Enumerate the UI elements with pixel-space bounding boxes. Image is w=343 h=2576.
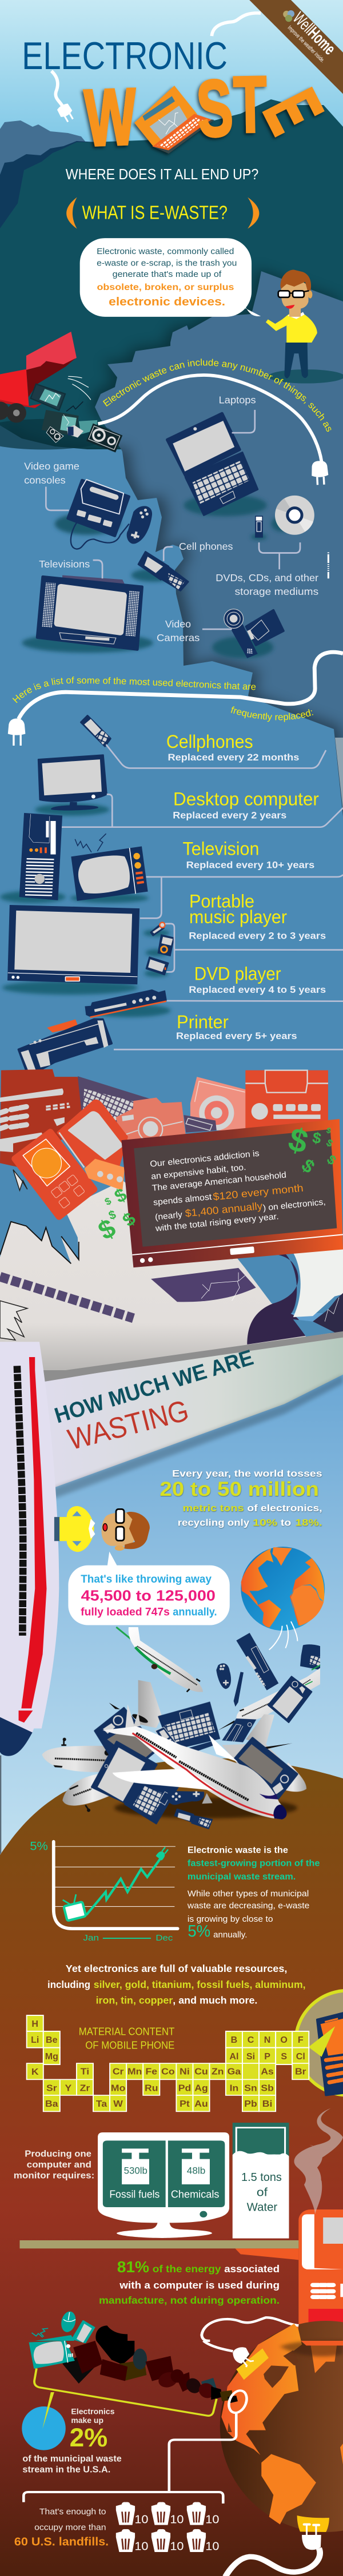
television: Televisions [39,558,90,570]
energy text: 81% [117,2259,149,2276]
growth text: annually. [213,1930,247,1939]
landfill text: That's enough to [39,2507,106,2517]
globe bottom [220,2321,343,2532]
periodic table lower rows: Sr [46,2084,57,2093]
periodic table lower rows: Cr [113,2067,124,2076]
red electronics pile [0,1069,328,1217]
speech bubble: definition: electronic devices. [109,295,225,308]
laptop screen with addiction text: $1,400 annually [185,1200,263,1219]
dollar signs: $ [107,1208,118,1222]
stat text: tosses [159,1468,322,1528]
yellow bracket and pie [22,2368,217,2450]
periodic table top rows: Mg [45,2051,58,2062]
fuselage panel [0,1181,343,1370]
curved caption 2: Here is a list of some of the most used electronics that are [13,677,256,703]
dollar signs: $ [325,1126,332,1136]
cable at top [212,13,261,36]
monitor: fossil fuels and chemicals: 48lb [187,2165,205,2176]
plane: lower left [62,1774,113,1812]
red dump truck [0,332,114,449]
growth chart: 5% [30,1840,48,1853]
growth chart: Dec [155,1934,173,1943]
heading: what is e-waste [66,198,259,229]
character legs [268,343,343,384]
periodic table lower rows: In [230,2084,238,2093]
video camera [157,609,284,658]
energy text: of the energy [153,2263,221,2275]
resources text: silver, gold, titanium, fossil fuels, aluminum, [94,1979,306,1990]
periodic table top rows: Cl [296,2051,305,2062]
speech bubble: 747s: fully loaded 747s [81,1606,170,1618]
glass of water: Water [247,2201,277,2213]
growth text: fastest-growing portion of the [188,1859,320,1869]
trash can row 2: 10 [170,2539,184,2553]
brown ribbon with logo [249,0,343,94]
globe [241,1547,325,1650]
fuselage red stripe [13,1357,47,1733]
periodic table lower rows: Ti [81,2067,89,2076]
laptop screen with addiction text: Our electronics addiction is [150,1149,260,1169]
periodic table lower rows: Mn [127,2067,142,2076]
disc and usb drive: storage mediums [235,586,318,597]
growth chart: Jan [83,1934,99,1943]
growth text: waste are decreasing, e-waste [187,1901,309,1910]
stat text: tosses: 10% [253,1517,277,1528]
electronics make up text: of the municipal waste [22,2453,122,2464]
stat text: tosses: 20 to 50 million [159,1478,319,1500]
tumbling screens [31,376,122,452]
disc and usb drive: DVDs, CDs, and other [216,572,318,583]
periodic table lower rows [27,2063,309,2111]
electronics make up text: Electronics [71,2407,115,2416]
periodic table lower rows: W [113,2099,123,2109]
growth text: While other types of municipal [188,1889,309,1898]
curved caption 1: Electronic waste can include any number of things, such as: [103,359,332,432]
dollar signs: $ [118,1208,139,1230]
periodic table top rows: Li [31,2035,39,2045]
dvd player row: DVD player [194,964,281,984]
speech bubble: 747s [68,1552,230,1625]
laptop screen with addiction text: an expensive habit, too. [151,1162,246,1182]
video camera: Cameras [157,632,200,643]
periodic table lower rows: Co [161,2067,175,2076]
speech bubble: definition: generate that's made up of [113,270,222,279]
laptop: Laptops [219,394,256,405]
stat text: tosses: Every year, the world tosses [172,1468,322,1479]
letter T: T [233,61,268,150]
portable music players row: music player [189,907,287,927]
trash can row 1: 10 [205,2513,219,2526]
monitor: fossil fuels and chemicals: 530lb [124,2165,147,2176]
glass of water: 1.5 tons [241,2171,282,2184]
curved caption 3: frequently replaced: [231,706,313,722]
dollar signs: $ [93,1213,121,1246]
small phone [155,1727,177,1749]
dollar signs: $ [324,1152,340,1168]
speech bubble: 747s: 45,500 to 125,000 [81,1587,216,1604]
energy text [99,2259,280,2307]
trash can row 1: 10 [170,2513,184,2526]
portable music players row [143,891,343,977]
plane: right ground [282,1762,306,1792]
periodic table lower rows: Ni [180,2067,190,2076]
laptop screen with addiction text: with the total rising every year. [154,1211,279,1234]
video camera: Video [165,618,191,630]
periodic table lower rows: Ba [45,2099,58,2109]
periodic table lower rows: Cu [194,2067,208,2076]
phone callout circle [294,1989,343,2097]
energy text: with a computer is used during [119,2280,280,2291]
white cable to globe [202,2317,298,2341]
torn edge outline [0,1222,79,1263]
background: dark teal hill [0,99,343,571]
periodic table lower rows: Ru [145,2084,158,2093]
periodic table top rows: O [280,2035,288,2045]
television row: Replaced every 10+ years [186,860,314,871]
periodic table lower rows: Pd [178,2084,191,2093]
periodic table top rows: S [281,2051,287,2062]
section: falling planes and gadget pile [42,1627,320,1829]
cellphones row: Replaced every 22 months [167,752,299,763]
desktop computer row: Replaced every 2 years [173,810,286,820]
periodic table lower rows: Zr [80,2084,90,2093]
growth text: municipal waste stream. [188,1872,296,1882]
landfill text: 60 U.S. landfills. [14,2535,109,2548]
resources text: , and much more. [173,1995,257,2006]
plane: right rising with tablet [236,1668,320,1722]
white cable 1 with plug [98,375,329,485]
monitor: fossil fuels and chemicals: Fossil fuels [109,2189,159,2200]
brown ribbon with logo: Improve the weather inside. [286,25,326,64]
background: navy mountains [0,141,97,240]
trash can row 1 [116,2502,219,2526]
growth text [187,1846,320,1941]
producing text: monitor requires: [14,2171,94,2180]
trash can row 2 [116,2529,219,2553]
plane window row [0,1277,133,1318]
pile shadow [114,1797,297,1818]
periodic table top rows: N [264,2035,270,2045]
stat text: tosses: metric tons [183,1503,244,1514]
resources text: including [47,1979,90,1990]
resources text: Yet electronics are full of valuable resources, [66,1963,287,1974]
portable music players row: Replaced every 2 to 3 years [189,931,326,941]
plane tails behind pile [109,1680,293,1772]
section: bottom stats [14,2324,343,2576]
laptop top [158,1702,220,1753]
growth text: is growing by close to [188,1915,273,1924]
dollar signs: $ [111,1184,130,1207]
dollar signs: $ [102,1195,113,1208]
speech bubble: definition: obsolete, broken, or surplus [97,282,234,292]
teal tv [29,2341,75,2369]
subtitle: WHERE DOES IT ALL END UP? [66,166,258,183]
right tablet [235,1738,297,1798]
section: intro and title [22,0,343,124]
laptop screen with addiction text: spends almost [153,1192,213,1208]
stat text: tosses: 18%. [296,1517,322,1528]
title cable and plug [51,71,76,124]
periodic table top rows: F [298,2035,304,2045]
desktop computer row: Desktop computer [173,788,319,809]
cellphones row [81,716,326,768]
computer tower [0,813,66,903]
trash can row 2: 10 [134,2539,148,2553]
fuselage body [0,1342,59,1729]
section: how much we are wasting [0,1338,343,1733]
section: materials and energy [14,2063,343,2532]
television row: Television [183,839,259,859]
plug into globe top [204,2341,254,2367]
landfill text: occupy more than [34,2523,106,2532]
glass of water: of [257,2186,268,2199]
letter S: S [194,63,236,155]
background: sky [0,0,343,171]
television row [70,834,343,918]
title: waste [83,61,339,163]
printer row: Printer [177,1012,229,1032]
growth text: Electronic waste is the [188,1846,288,1855]
smoke [294,2108,343,2214]
periodic table lower rows: Y [65,2084,71,2093]
producing text: computer and [27,2160,91,2170]
heading: material content [79,2025,174,2051]
laptop screen with addiction text [121,1119,343,1267]
periodic table lower rows: Zn [212,2067,224,2076]
periodic table lower rows: Sb [261,2084,274,2093]
game console: Video game [24,461,79,472]
dollar signs: $ [324,1137,335,1149]
white connector ring and bracket [23,2389,250,2503]
dollar signs: $ [311,1129,322,1147]
orange device base [301,2341,343,2345]
speech bubble: 747s: That's like throwing away [81,1573,212,1585]
flip phone on ground [175,1809,213,1829]
periodic table top rows: C [248,2035,254,2045]
device right behind plane [222,1718,256,1742]
dvd player row [85,964,343,1017]
growth text: 5% [188,1922,210,1941]
background: light blue layer [0,425,343,1382]
television [22,558,153,653]
landfill text [14,2507,109,2548]
floating gadgets [216,1633,320,1706]
title: electronic: ELECTRONIC [22,34,228,78]
wing top strip [66,1331,343,1379]
energy text: associated [224,2263,280,2275]
periodic table top rows: Si [246,2051,255,2062]
dollar signs: $ [285,1121,312,1161]
dollar signs: $ [297,1155,318,1177]
periodic table top rows: H [31,2019,38,2029]
heading: material content: MATERIAL CONTENT [79,2025,174,2037]
monitor: fossil fuels and chemicals [98,2132,229,2238]
background: brown earth [0,1758,343,2576]
section: replacement list [0,650,343,1077]
fuselage windows [17,1366,23,1636]
periodic table lower rows: Br [295,2067,306,2076]
game console: consoles [24,474,66,486]
globe socket bottom with plug and cable [225,2515,329,2576]
black waste stream [62,2341,238,2403]
plane: left [42,1738,116,1772]
laptop base with keys [125,1764,179,1824]
electronics make up text: stream in the U.S.A. [22,2464,110,2474]
nose pieces dark tears [0,1170,27,1340]
trash can row 2: 10 [205,2539,219,2553]
speech bubble: definition: Electronic waste, commonly called [97,247,234,256]
printer row: Replaced every 5+ years [176,1031,297,1041]
teal gadgets at top of stream [31,2311,127,2342]
resources text: iron, tin, copper [96,1995,173,2006]
laptop screen with addiction text: The average American household [151,1170,287,1193]
background: far mountains [0,120,89,188]
letter W: W [83,73,138,163]
background: layer shadow [90,269,338,512]
laptop screen with addiction text: ) on electronics, [262,1197,326,1213]
background: blue-gray layer [95,271,343,856]
periodic table top rows: P [264,2051,270,2062]
cell phone: Cell phones [179,541,233,552]
heading: what is e-waste: WHAT IS E-WASTE? [82,202,228,223]
speech bubble: definition: e-waste or e-scrap, is the trash you [97,259,237,268]
plane wing panel [25,1338,343,1499]
periodic table lower rows: K [31,2067,39,2077]
heading: wasting: WASTING [65,1394,192,1456]
periodic table top rows: Al [229,2051,238,2062]
background: light blue layer shadow [7,423,343,854]
periodic table lower rows: Pb [244,2099,257,2109]
section: big plane nose [0,1708,42,1855]
periodic table top rows [27,2015,309,2064]
periodic table lower rows: Fe [146,2067,157,2076]
disc and usb drive [216,496,318,597]
producing text: Producing one [25,2150,91,2159]
periodic table lower rows: Ga [228,2067,241,2076]
stat text: tosses: to [281,1517,291,1528]
printer row [19,1012,343,1076]
periodic table top rows: Be [46,2035,58,2045]
periodic table lower rows: Sn [244,2084,257,2093]
section: device list [0,308,343,660]
cell phone [131,541,233,590]
orange appliance with shelf [19,2209,343,2345]
engine shapes [151,1248,343,1345]
falling plane with green stripe [116,1627,203,1692]
speech bubble: 747s: annually. [173,1606,217,1618]
electronics make up text: make up [71,2416,103,2425]
letter E: E [247,78,339,146]
laptop as letter A [134,86,214,154]
stat text: tosses: recycling only [178,1517,250,1528]
periodic table lower rows: Ag [194,2084,208,2093]
stat text: tosses: of electronics, [247,1503,322,1514]
glass of water [233,2123,289,2239]
laptop [167,394,267,516]
globe continents [221,2324,343,2525]
game console [24,461,152,549]
periodic table lower rows: Ta [96,2099,107,2109]
producing text [14,2150,94,2180]
speech bubble: definition [80,238,261,317]
tablet top left [95,1708,158,1777]
decorative i-bar [326,552,330,578]
dvd player row: Replaced every 4 to 5 years [189,984,326,995]
periodic table lower rows: Mo [111,2084,125,2093]
electronics make up text: 2% [70,2424,107,2452]
desktop computer row [35,755,343,827]
laptop screen with addiction text: (nearly [154,1210,183,1222]
character: man in yellow [266,269,317,343]
laptop screen with addiction text: $120 every month [212,1182,304,1202]
background: right edge sliver [335,738,343,811]
cellphones row: Cellphones [166,731,253,752]
periodic table lower rows: Au [194,2099,208,2109]
heading: how much we are: HOW MUCH WE ARE [51,1345,256,1428]
crashed jumbo jet [102,1704,286,1820]
section: torn plane and money [0,1069,343,1379]
electronics make up text [22,2407,122,2474]
growth chart [30,1840,178,1943]
monitor: fossil fuels and chemicals: Chemicals [171,2189,219,2200]
periodic table top rows: B [231,2035,237,2045]
periodic table lower rows: Bi [262,2099,272,2109]
white cable 2 with plug [8,652,343,746]
gamepad on ground [167,1791,213,1805]
resources text [47,1963,306,2006]
periodic table lower rows: As [261,2067,274,2076]
big tablet left [92,1742,157,1806]
globe socket top [236,2348,269,2380]
section: chart and resources [27,1840,343,2097]
trash can row 1: 10 [134,2513,148,2526]
energy text: manufacture, not during operation. [99,2295,280,2307]
character: lying head [54,1506,150,1552]
background: lower sky [0,1313,343,1855]
heading: material content: OF MOBILE PHONE [85,2039,174,2051]
periodic table lower rows: Pt [180,2099,190,2109]
flat screen tv [2,905,139,995]
portable music players row: Portable [189,891,254,912]
dollar signs [93,1121,340,1246]
device shadow on globe [280,2341,343,2356]
